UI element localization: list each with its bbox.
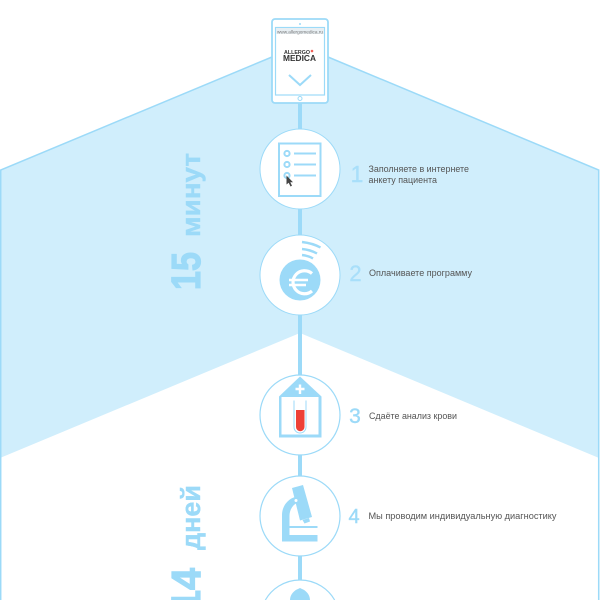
step 4 number: 4 [348, 506, 360, 528]
step 5 icon: partially cropped [265, 580, 335, 600]
step 2 text: Оплачиваете программу [369, 268, 472, 278]
heading: 15 minutes [163, 153, 209, 290]
step 4 icon: microscope [260, 476, 340, 556]
icon: tablet with website: MEDICA [283, 53, 316, 63]
step 1 icon: questionnaire [260, 129, 340, 209]
step 4 text: Мы проводим индивидуальную диагностику [368, 511, 557, 521]
heading: 14 days [163, 485, 209, 600]
step 3 number: 3 [349, 405, 361, 428]
heading: 15 minutes: 15 [163, 252, 209, 290]
step 2 icon: euro payment [260, 235, 340, 315]
step 2 number: 2 [349, 261, 362, 286]
step 1 text: анкету пациента [368, 175, 437, 185]
icon: tablet with website [272, 19, 328, 103]
step 3 icon: blood test [260, 375, 340, 455]
step 1 number: 1 [351, 161, 363, 187]
heading: 15 minutes: минут [176, 153, 206, 237]
step 1 text: Заполняете в интернете [368, 164, 469, 174]
icon: tablet with website: www.allergomedica.ru [277, 29, 323, 35]
step 3 text: Сдаёте анализ крови [369, 411, 457, 421]
icon: tablet with website: ALLERGO [284, 50, 311, 56]
timeline connector [298, 100, 302, 600]
heading: 14 days: дней [176, 485, 206, 550]
